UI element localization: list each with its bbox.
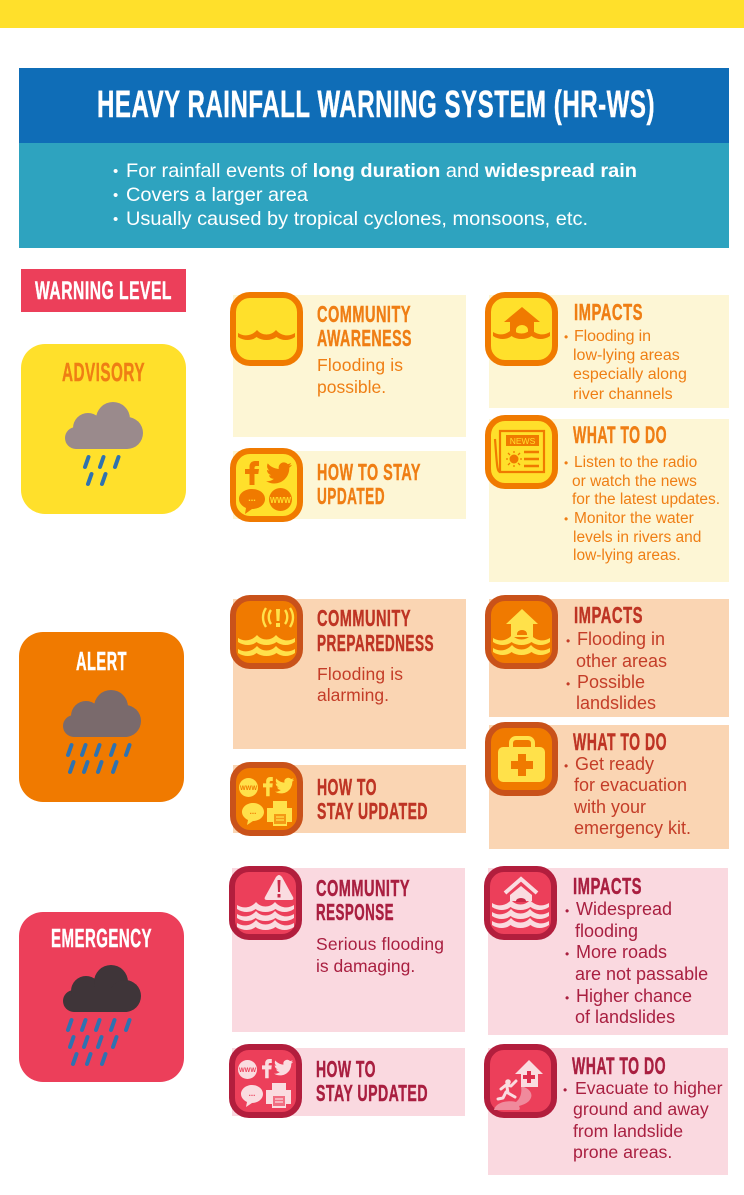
icon: social media and print: ... (249, 1089, 255, 1098)
panel: impacts (emergency): IMPACTS (573, 873, 642, 899)
panel: impacts (emergency): Higher chance (576, 986, 692, 1006)
panel: impacts (advisory): low-lying areas (573, 347, 680, 364)
panel: impacts (alert): • (566, 634, 570, 648)
panel: impacts (emergency): • (565, 904, 569, 918)
icon: house in waves (488, 598, 555, 666)
icon: social media and print (233, 765, 300, 833)
panel: what to do (advisory): Listen to the radio (574, 454, 697, 471)
warning level label (21, 269, 186, 312)
panel: what to do (alert): Get ready (575, 754, 654, 774)
panel: impacts (alert): other areas (576, 651, 667, 671)
icon: alert rain cloud (63, 690, 141, 772)
icon: submerged house (487, 869, 554, 937)
panel: what to do (emergency): WHAT TO DO (572, 1053, 666, 1080)
icon: house in water (488, 295, 555, 363)
icon: newspaper (488, 418, 555, 486)
advisory card: ADVISORY (62, 357, 145, 387)
panel: what to do (emergency): Evacuate to higher (575, 1078, 723, 1098)
description bullets: • (113, 187, 118, 204)
icon: social media (233, 451, 300, 519)
panel: community awareness: Flooding is (317, 355, 403, 375)
panel: impacts (advisory): IMPACTS (574, 299, 643, 325)
panel: what to do (advisory): WHAT TO DO (573, 422, 667, 449)
panel: community preparedness: PREPAREDNESS (317, 630, 434, 656)
panel: what to do (emergency): ground and away (573, 1099, 709, 1119)
icon: warning over deep water (232, 869, 299, 937)
icon: alarm over waves (233, 598, 300, 666)
description panel (19, 143, 729, 248)
panel: community awareness: AWARENESS (317, 325, 412, 351)
panel: impacts (alert): landslides (576, 693, 656, 713)
panel: impacts (advisory): Flooding in (574, 328, 651, 345)
icon: person running to shelter (487, 1047, 554, 1115)
description bullets (113, 160, 637, 230)
panel: impacts (emergency): • (565, 991, 569, 1005)
panel: what to do (emergency): prone areas. (573, 1142, 672, 1162)
panel: what to do (advisory): levels in rivers and (573, 529, 701, 546)
panel: impacts (alert): Flooding in (577, 629, 665, 649)
icon: social media: WWW (270, 496, 291, 505)
description bullets: For rainfall events of long duration and widespread rain (126, 160, 637, 182)
panel: impacts (advisory): especially along (573, 366, 687, 383)
panel: how to stay updated (emergency): STAY UPDATED (316, 1080, 428, 1106)
title banner (19, 68, 729, 143)
panel: impacts (advisory) (488, 295, 729, 408)
icon: social media and print: ... (250, 807, 256, 816)
panel: what to do (alert): • (564, 759, 568, 773)
panel: how to stay updated (emergency): HOW TO (316, 1056, 376, 1082)
panel: impacts (emergency): Widespread (576, 899, 672, 919)
panel: impacts (emergency) (487, 868, 728, 1035)
description bullets: Covers a larger area (126, 184, 308, 206)
panel: community preparedness (233, 598, 466, 749)
alert card: ALERT (76, 646, 127, 676)
panel: what to do (emergency) (487, 1047, 728, 1175)
icon: social media: ... (248, 493, 256, 503)
icon: social media and print (232, 1047, 299, 1115)
panel: what to do (emergency): from landslide (573, 1121, 683, 1141)
top yellow band (0, 0, 744, 28)
icon: emergency kit (488, 725, 555, 793)
emergency card: EMERGENCY (51, 923, 152, 953)
panel: community response: is damaging. (316, 956, 415, 976)
panel: how to stay updated (alert) (233, 765, 466, 833)
icon: water line (233, 295, 300, 363)
description bullets: • (113, 163, 118, 180)
panel: how to stay updated (alert): STAY UPDATED (317, 798, 428, 824)
panel: what to do (advisory): or watch the news (572, 473, 697, 490)
panel: impacts (advisory): • (564, 330, 568, 344)
emergency card (19, 912, 184, 1082)
panel: what to do (advisory): • (564, 456, 568, 470)
panel: community preparedness: COMMUNITY (317, 605, 411, 631)
icon: social media and print: WWW (240, 785, 258, 792)
panel: community awareness: COMMUNITY (317, 301, 411, 327)
panel: what to do (alert): WHAT TO DO (573, 729, 667, 756)
panel: what to do (advisory) (488, 418, 729, 582)
panel: community response: Serious flooding (316, 934, 444, 954)
icon: newspaper: NEWS (510, 436, 536, 446)
panel: impacts (emergency): are not passable (575, 964, 708, 984)
panel: community awareness (233, 295, 466, 437)
alert card (19, 632, 184, 802)
panel: what to do (advisory): for the latest updates. (572, 491, 720, 508)
panel: what to do (alert): emergency kit. (574, 818, 691, 838)
icon: advisory rain cloud (65, 402, 143, 484)
panel: what to do (emergency): • (563, 1083, 567, 1097)
panel: impacts (advisory): river channels (573, 386, 673, 403)
panel: community awareness: possible. (317, 377, 386, 397)
panel: what to do (advisory): Monitor the water (574, 510, 694, 527)
panel: community response (232, 868, 465, 1032)
panel: impacts (alert): IMPACTS (574, 602, 643, 628)
description bullets: • (113, 211, 118, 228)
advisory card (21, 344, 186, 514)
panel: how to stay updated (advisory): HOW TO STAY (317, 459, 421, 485)
panel: what to do (advisory): low-lying areas. (573, 547, 681, 564)
panel: how to stay updated (alert): HOW TO (317, 774, 377, 800)
panel: impacts (emergency): • (565, 947, 569, 961)
panel: community preparedness: alarming. (317, 685, 389, 705)
panel: what to do (alert): for evacuation (574, 775, 687, 795)
icon: social media and print: WWW (239, 1067, 257, 1074)
panel: impacts (emergency): More roads (576, 942, 667, 962)
icon: emergency rain cloud (63, 965, 141, 1064)
panel: impacts (alert): Possible (577, 672, 645, 692)
panel: impacts (emergency): flooding (575, 921, 638, 941)
panel: what to do (alert) (488, 725, 729, 849)
panel: what to do (alert): with your (573, 797, 646, 817)
panel: how to stay updated (advisory) (233, 451, 466, 519)
panel: community response: RESPONSE (316, 899, 394, 925)
panel: what to do (advisory): • (564, 512, 568, 526)
panel: impacts (alert): • (566, 677, 570, 691)
panel: how to stay updated (emergency) (232, 1047, 465, 1116)
description bullets: Usually caused by tropical cyclones, monsoons, etc. (126, 208, 588, 230)
panel: how to stay updated (advisory): UPDATED (317, 483, 385, 509)
panel: community preparedness: Flooding is (317, 664, 403, 684)
warning level label: WARNING LEVEL (35, 277, 172, 305)
panel: impacts (emergency): of landslides (575, 1007, 675, 1027)
panel: community response: COMMUNITY (316, 875, 410, 901)
panel: impacts (alert) (488, 598, 729, 717)
